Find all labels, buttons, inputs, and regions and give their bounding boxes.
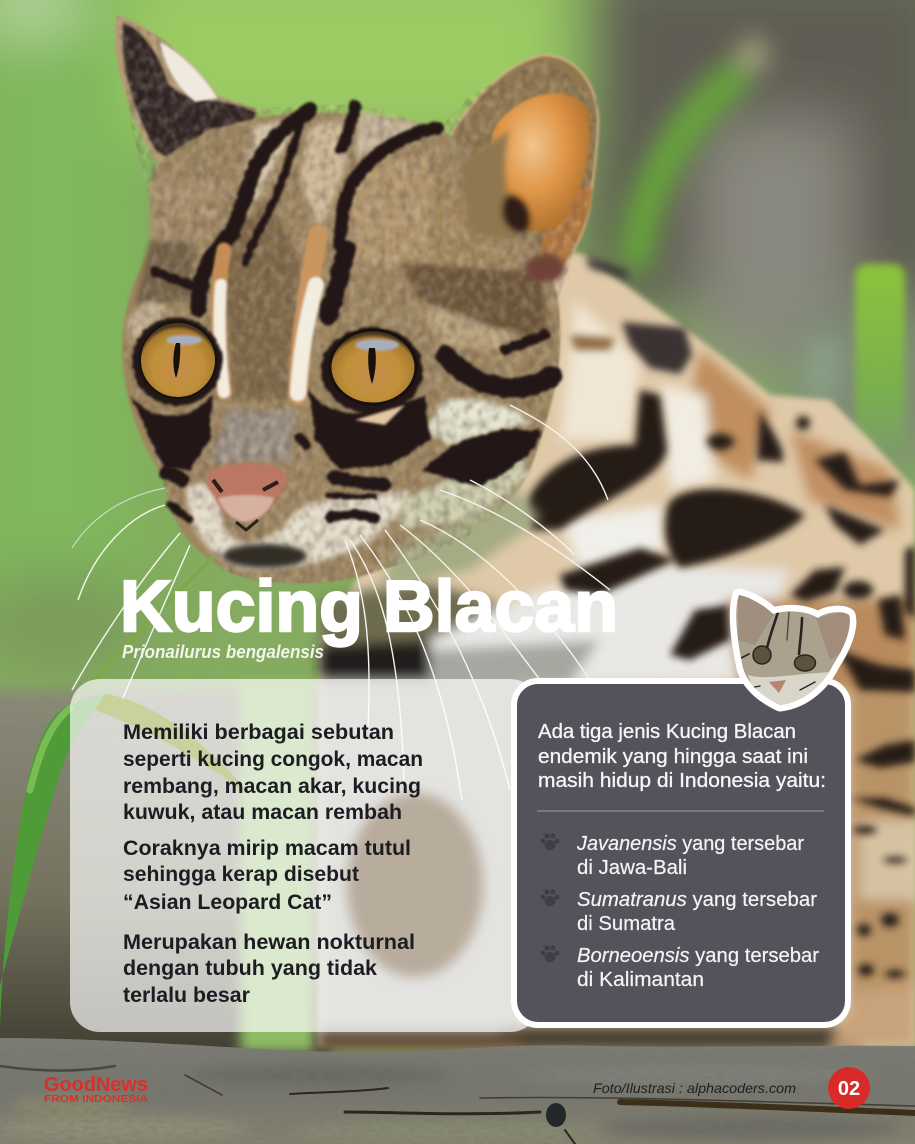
photo: cat body [318, 250, 915, 1050]
page number badge: 02 [838, 1078, 860, 1100]
icon: paw 3 [541, 945, 559, 962]
text: species list: di Kalimantan [577, 969, 704, 991]
pale leaf seen through panel [95, 694, 250, 795]
tan under eye [355, 405, 405, 425]
text: intro [538, 721, 826, 792]
text: facts: seperti kucing congok, macan [123, 748, 423, 771]
whiskers [72, 405, 610, 800]
text: facts: Coraknya mirip macam tutul [123, 837, 411, 860]
text: species list: Sumatranus yang tersebar [577, 889, 817, 911]
photo: cat head [122, 112, 560, 590]
text: species list [576, 833, 819, 991]
text: species list: Borneoensis yang tersebar [577, 945, 819, 967]
white facial streaks [219, 235, 318, 395]
right ear [435, 55, 598, 287]
left ear white patch [160, 42, 218, 102]
text: facts: “Asian Leopard Cat” [123, 891, 332, 914]
body spots [525, 256, 915, 978]
text: intro: Ada tiga jenis Kucing Blacan [538, 721, 796, 743]
panel: three species [514, 681, 848, 1025]
left ear [115, 15, 258, 215]
text: intro: masih hidup di Indonesia yaitu: [538, 770, 826, 792]
text: facts: sehingga kerap disebut [123, 863, 359, 886]
body colour patches [318, 300, 915, 1050]
left eye [140, 322, 216, 398]
page number badge [828, 1067, 870, 1109]
title: Kucing Blacan [120, 567, 618, 647]
fur texture overlay [110, 10, 610, 590]
right eye [330, 330, 416, 404]
photo: face markings [130, 42, 590, 568]
icon: paw 1 [541, 833, 559, 850]
logo: GoodNews from Indonesia: GoodNews [44, 1074, 148, 1096]
dark eye rims [130, 318, 430, 470]
text: facts: Memiliki berbagai sebutan [123, 721, 394, 744]
light fur areas [128, 112, 550, 570]
photo credit: Foto/Ilustrasi : alphacoders.com [593, 1080, 796, 1096]
paw seen through panel [347, 793, 483, 977]
lower background behind panel [240, 680, 315, 1052]
text: facts: Merupakan hewan nokturnal [123, 931, 415, 954]
text: species list: di Sumatra [577, 913, 676, 935]
text: facts: dengan tubuh yang tidak [123, 957, 377, 980]
text: intro: endemik yang hingga saat ini [538, 746, 808, 768]
cheek ruff [380, 490, 540, 590]
text: species list: Javanensis yang tersebar [576, 833, 804, 855]
subtitle: latin name: Prionailurus bengalensis [122, 642, 324, 662]
log at bottom [0, 1038, 915, 1144]
head stripes [155, 106, 552, 520]
photo: cat ears [115, 15, 598, 287]
panel: description (translucent) [70, 679, 540, 1032]
text: facts: terlalu besar [123, 984, 250, 1007]
nose [207, 463, 286, 530]
text: facts [123, 721, 423, 1007]
text: species list: di Jawa-Bali [577, 857, 687, 879]
icon: small cat head sticker [730, 590, 855, 710]
right ear inner [460, 93, 590, 282]
logo: GoodNews from Indonesia: FROM INDONESIA [44, 1093, 148, 1105]
icon: paw 2 [541, 889, 559, 906]
text: facts: rembang, macan akar, kucing [123, 775, 421, 798]
text: facts: kuwuk, atau macan rembah [123, 801, 402, 824]
chin shadow [223, 544, 307, 568]
grass blade [0, 558, 212, 1025]
